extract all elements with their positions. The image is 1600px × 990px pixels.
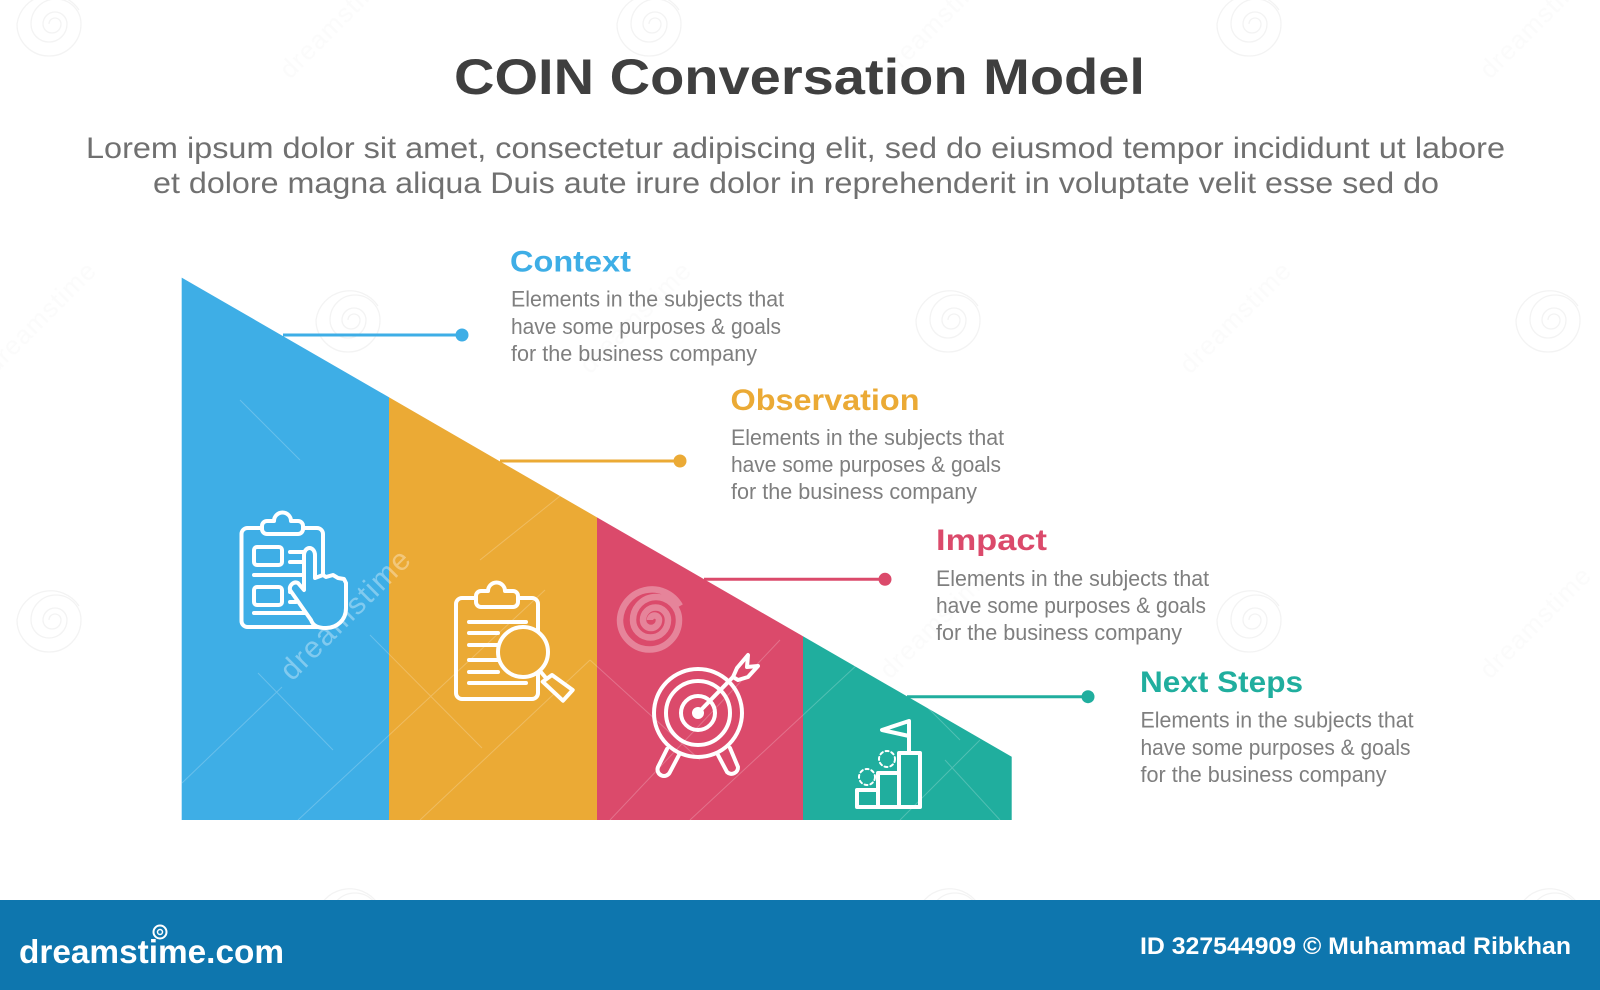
text block: observation: for the business company: [731, 479, 978, 504]
text block: next steps: have some purposes & goals: [1140, 735, 1410, 760]
icon: clipboard with hand: [242, 512, 346, 628]
text block: observation: Elements in the subjects that: [731, 425, 1005, 450]
icon: target with arrow: [654, 655, 758, 776]
text: dreamstime: [1473, 560, 1597, 684]
subtitle text: Lorem ipsum dolor sit amet, consectetur adipiscing elit, sed do eiusmod tempor incididunt ut labore: [86, 132, 1505, 165]
callout: observation: [500, 384, 1005, 504]
text block: impact: for the business company: [936, 620, 1183, 645]
heading: next steps: Next Steps: [1140, 666, 1303, 699]
icon: stairs with flag: [857, 721, 920, 807]
panel: next steps segment: [803, 636, 1012, 820]
text block: context: have some purposes & goals: [511, 314, 781, 339]
panel: impact segment: [597, 517, 803, 820]
callout: impact: [704, 524, 1210, 645]
leader line: context: [283, 328, 468, 342]
text block: context: for the business company: [511, 341, 758, 366]
callout: context: [283, 246, 785, 366]
stepped triangle chart: dreamstime: [274, 542, 418, 687]
text block: impact: have some purposes & goals: [936, 593, 1206, 618]
footer credit: ID 327544909 © Muhammad Ribkhan: [1140, 933, 1571, 960]
text: dreamstime: [1173, 255, 1297, 379]
text block: next steps: [1140, 708, 1414, 787]
panel: observation segment: [389, 397, 597, 820]
text block: observation: have some purposes & goals: [731, 452, 1001, 477]
footer logo: dreamstime.com: [19, 933, 284, 970]
text: dreamstime: [573, 255, 697, 379]
title: COIN Conversation Model: [454, 49, 1145, 105]
text: dreamstime: [873, 560, 997, 684]
text block: impact: Elements in the subjects that: [936, 566, 1210, 591]
subtitle text: et dolore magna aliqua Duis aute irure dolor in reprehenderit in voluptate velit esse sed do: [153, 167, 1439, 200]
panel: context segment: [182, 278, 389, 820]
subtitle text: [86, 132, 1505, 200]
leader line: next steps: [907, 690, 1094, 703]
text block: context: [511, 286, 785, 366]
text block: impact: [936, 566, 1210, 645]
text block: next steps: Elements in the subjects that: [1140, 708, 1414, 732]
leader line: observation: [500, 454, 686, 468]
heading: context: Context: [510, 246, 631, 278]
leader line: impact: [704, 573, 892, 586]
stepped triangle chart: [182, 278, 1012, 820]
text block: observation: [731, 425, 1005, 504]
text block: context: Elements in the subjects that: [511, 286, 785, 312]
icon: clipboard with magnifier: [456, 582, 573, 701]
heading: impact: Impact: [936, 524, 1047, 557]
callout: next steps: [907, 666, 1414, 787]
text block: next steps: for the business company: [1140, 762, 1387, 787]
footer band: [0, 900, 1600, 990]
heading: observation: Observation: [730, 384, 920, 417]
